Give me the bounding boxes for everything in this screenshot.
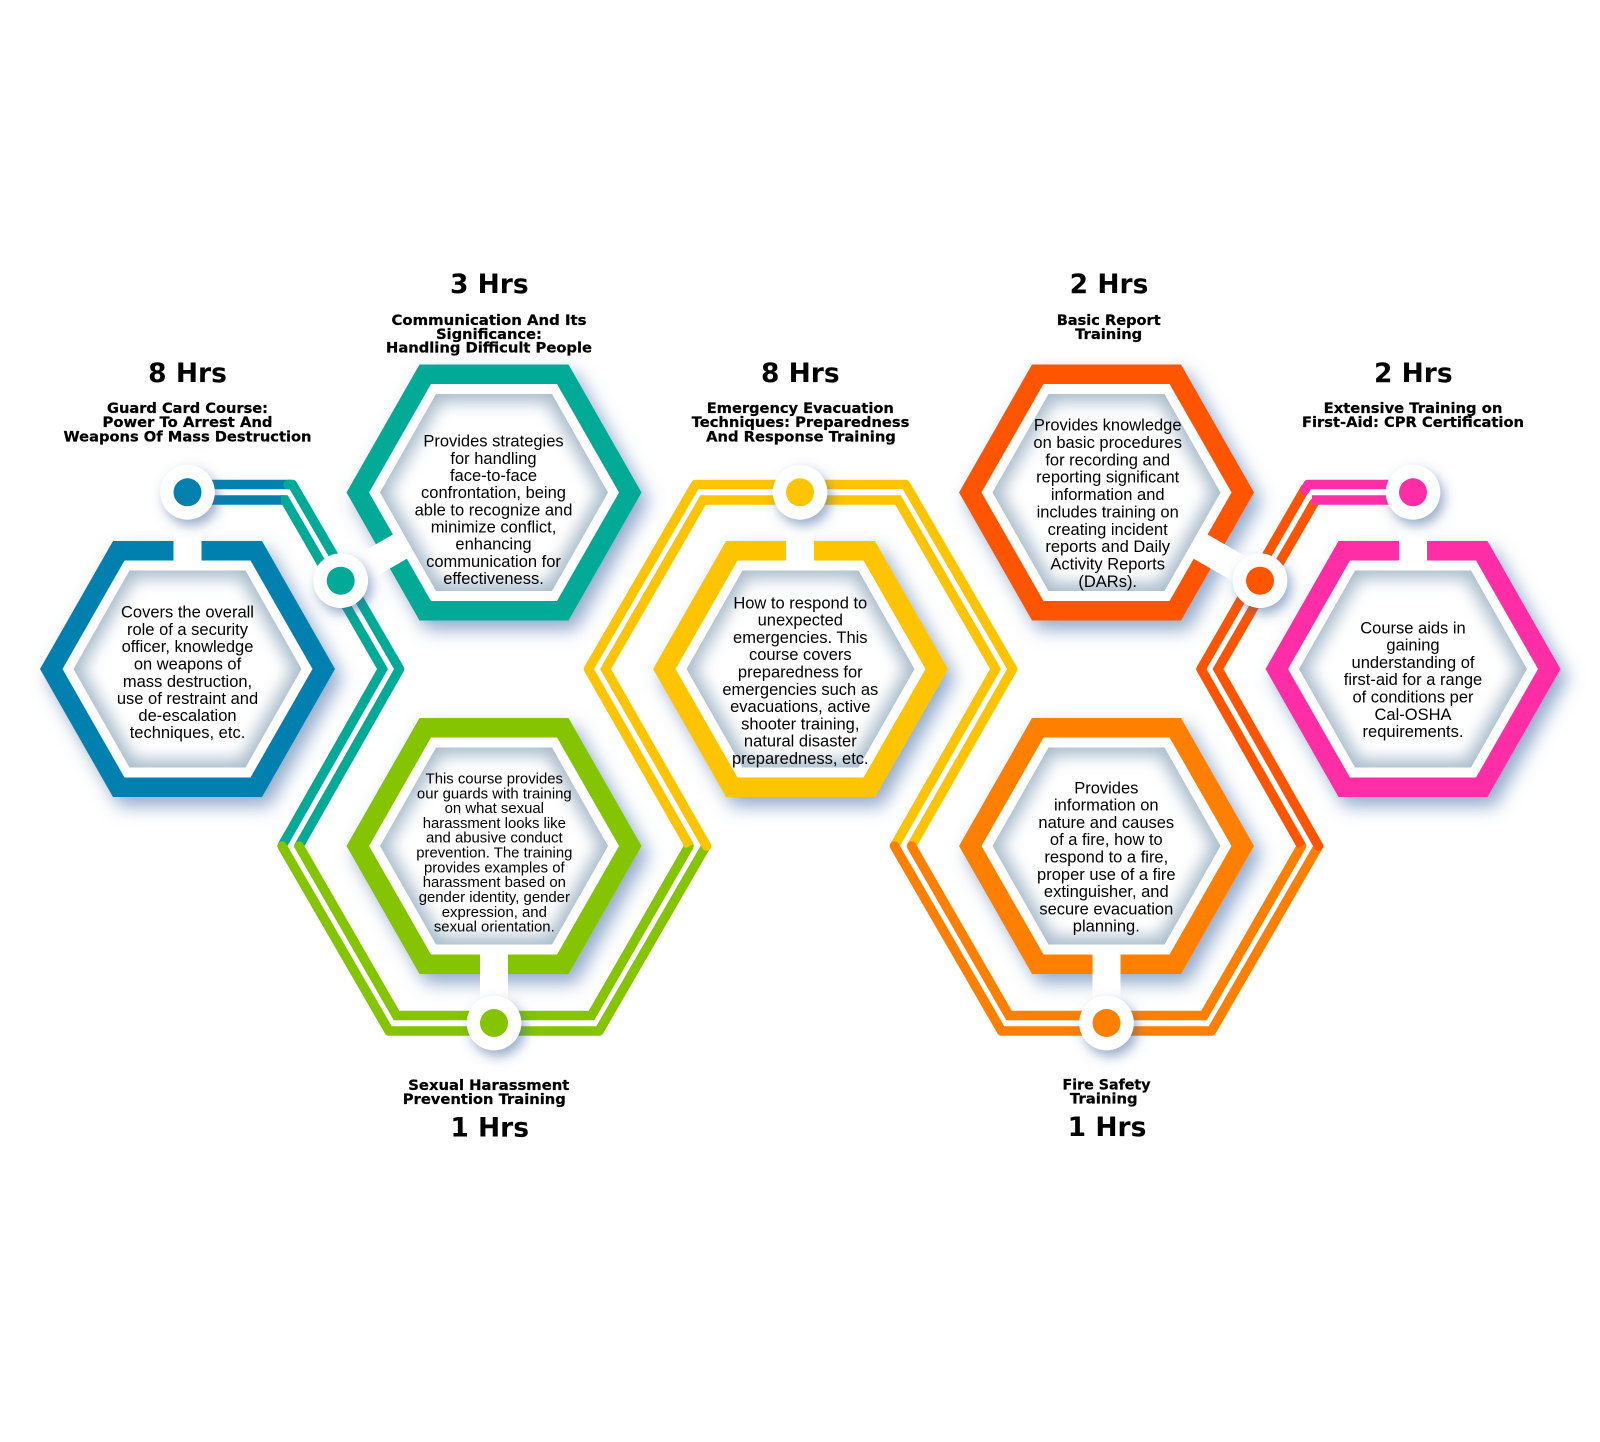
hexagon: teal [346, 364, 642, 620]
panel: guard card course [40, 358, 335, 797]
description: natural disaster [744, 733, 857, 751]
heading [1057, 313, 1161, 343]
duration: 3 Hrs [450, 269, 529, 300]
hexagon: green [346, 718, 642, 974]
heading: Techniques: Preparedness [692, 415, 909, 431]
description: de-escalation [138, 707, 237, 725]
description: for recording and [1045, 451, 1170, 469]
node [773, 465, 827, 520]
description: information on [1054, 797, 1159, 815]
description: This course provides [426, 772, 563, 788]
hexagon: pink [1266, 541, 1560, 797]
description: and abusive conduct [426, 831, 563, 847]
description: evacuations, active [730, 698, 870, 716]
description: (DARs). [1078, 573, 1137, 591]
description [1033, 417, 1182, 591]
description: shooter training, [741, 715, 859, 733]
description: our guards with training [417, 786, 572, 802]
node [1079, 996, 1134, 1050]
description: requirements. [1363, 723, 1463, 741]
description: proper use of a fire [1037, 866, 1176, 884]
description: enhancing [455, 536, 532, 554]
line: yellow [588, 484, 1012, 846]
heading: Communication And Its [392, 313, 586, 329]
description: course covers [749, 646, 852, 664]
heading: Significance: [436, 327, 542, 343]
node [313, 553, 368, 608]
connector bar [341, 546, 401, 581]
heading: Training [1070, 1091, 1138, 1107]
description: of conditions per [1352, 688, 1474, 706]
description: Covers the overall [121, 604, 254, 622]
node [1386, 465, 1440, 520]
description: minimize conflict, [431, 518, 556, 536]
heading: First-Aid: CPR Certification [1302, 415, 1524, 431]
description: emergencies. This [733, 629, 868, 647]
description: creating incident [1048, 521, 1168, 539]
line: teal [281, 484, 400, 846]
description: for handling [450, 450, 537, 468]
heading: Training [1075, 327, 1142, 343]
panel: first-aid [1266, 358, 1560, 797]
heading: Sexual Harassment [408, 1078, 569, 1094]
connector bar [786, 492, 814, 564]
description [416, 772, 572, 936]
connector bar [174, 492, 202, 564]
description: emergencies such as [722, 681, 878, 699]
description: confrontation, being [421, 484, 566, 502]
description: role of a security [127, 621, 249, 639]
description: provides examples of [424, 860, 566, 876]
connector bar [1092, 952, 1120, 1024]
connector bar [1200, 546, 1260, 581]
hexagon: orange [959, 718, 1254, 974]
description: officer, knowledge [122, 638, 253, 656]
description: face-to-face [450, 467, 537, 485]
description: unexpected [758, 612, 843, 630]
panel: communication [313, 269, 642, 620]
description [415, 433, 572, 588]
description: effectiveness. [443, 570, 544, 588]
description: on what sexual [445, 801, 544, 817]
heading [386, 313, 592, 357]
description: extinguisher, and [1044, 883, 1169, 901]
heading [64, 401, 312, 446]
description [1037, 779, 1176, 936]
description: on weapons of [134, 656, 242, 674]
connector lines [187, 484, 1413, 1031]
description: Provides strategies [423, 433, 564, 451]
description: nature and causes [1038, 814, 1174, 832]
heading [1302, 401, 1524, 431]
description: harassment looks like [423, 816, 566, 832]
description: planning. [1073, 918, 1140, 936]
description: Activity Reports [1050, 556, 1165, 574]
heading: Weapons Of Mass Destruction [64, 430, 312, 446]
description: techniques, etc. [130, 724, 245, 742]
description: Course aids in [1360, 619, 1466, 637]
duration: 1 Hrs [1068, 1112, 1146, 1143]
heading: Power To Arrest And [102, 415, 272, 431]
duration: 2 Hrs [1374, 358, 1453, 389]
connector bar [480, 952, 508, 1024]
infographic canvas [38, 273, 1576, 1138]
heading: Handling Difficult People [386, 341, 592, 357]
description: gender identity, gender [419, 890, 570, 906]
description: sexual orientation. [434, 920, 555, 936]
description: mass destruction, [123, 673, 252, 691]
description: harassment based on [423, 875, 566, 891]
duration: 8 Hrs [761, 358, 840, 389]
panel: fire safety [959, 718, 1254, 1143]
description: gaining [1386, 637, 1440, 655]
panel: emergency evacuation [653, 358, 948, 797]
description: prevention. The training [416, 846, 572, 862]
line: green [282, 846, 706, 1031]
description: preparedness, etc. [732, 750, 869, 768]
description: How to respond to [733, 594, 867, 612]
heading [692, 401, 909, 446]
description: understanding of [1352, 654, 1475, 672]
description: communication for [426, 553, 561, 571]
description: on basic procedures [1033, 434, 1182, 452]
description: includes training on [1037, 503, 1179, 521]
description: able to recognize and [415, 501, 572, 519]
hexagon: red-orange [959, 364, 1254, 620]
description: Cal-OSHA [1374, 706, 1452, 724]
description: of a fire, how to [1050, 831, 1163, 849]
duration: 8 Hrs [148, 358, 227, 389]
heading [1062, 1077, 1151, 1107]
description: secure evacuation [1039, 900, 1173, 918]
heading: Basic Report [1057, 313, 1161, 329]
description [117, 604, 258, 742]
connector bar [1399, 492, 1427, 564]
description: preparedness for [738, 664, 863, 682]
duration: 1 Hrs [450, 1112, 529, 1143]
description: first-aid for a range [1344, 671, 1482, 689]
heading: Extensive Training on [1324, 401, 1502, 417]
node [1233, 553, 1287, 608]
heading [403, 1078, 569, 1108]
description: Provides knowledge [1034, 417, 1182, 435]
line: orange [894, 846, 1318, 1031]
line: blue [187, 484, 292, 500]
description [722, 594, 878, 768]
description: Provides [1074, 779, 1138, 797]
panel: basic report [959, 269, 1287, 620]
node [467, 996, 521, 1050]
description: expression, and [442, 905, 547, 921]
heading: And Response Training [706, 430, 896, 446]
description [1344, 619, 1482, 741]
hexagon: blue [40, 541, 335, 797]
line: red-orange [1201, 487, 1318, 846]
heading: Guard Card Course: [107, 401, 268, 417]
description: respond to a fire, [1044, 848, 1168, 866]
description: use of restraint and [117, 690, 258, 708]
line: pink [1305, 484, 1413, 500]
duration: 2 Hrs [1070, 269, 1148, 300]
hexagon: yellow [653, 541, 948, 797]
heading: Emergency Evacuation [707, 401, 894, 417]
heading: Fire Safety [1062, 1077, 1151, 1093]
panel: sexual harassment [346, 718, 642, 1143]
node [160, 465, 215, 520]
description: reports and Daily [1045, 538, 1171, 556]
description: information and [1051, 486, 1165, 504]
heading: Prevention Training [403, 1092, 566, 1108]
description: reporting significant [1036, 469, 1180, 487]
